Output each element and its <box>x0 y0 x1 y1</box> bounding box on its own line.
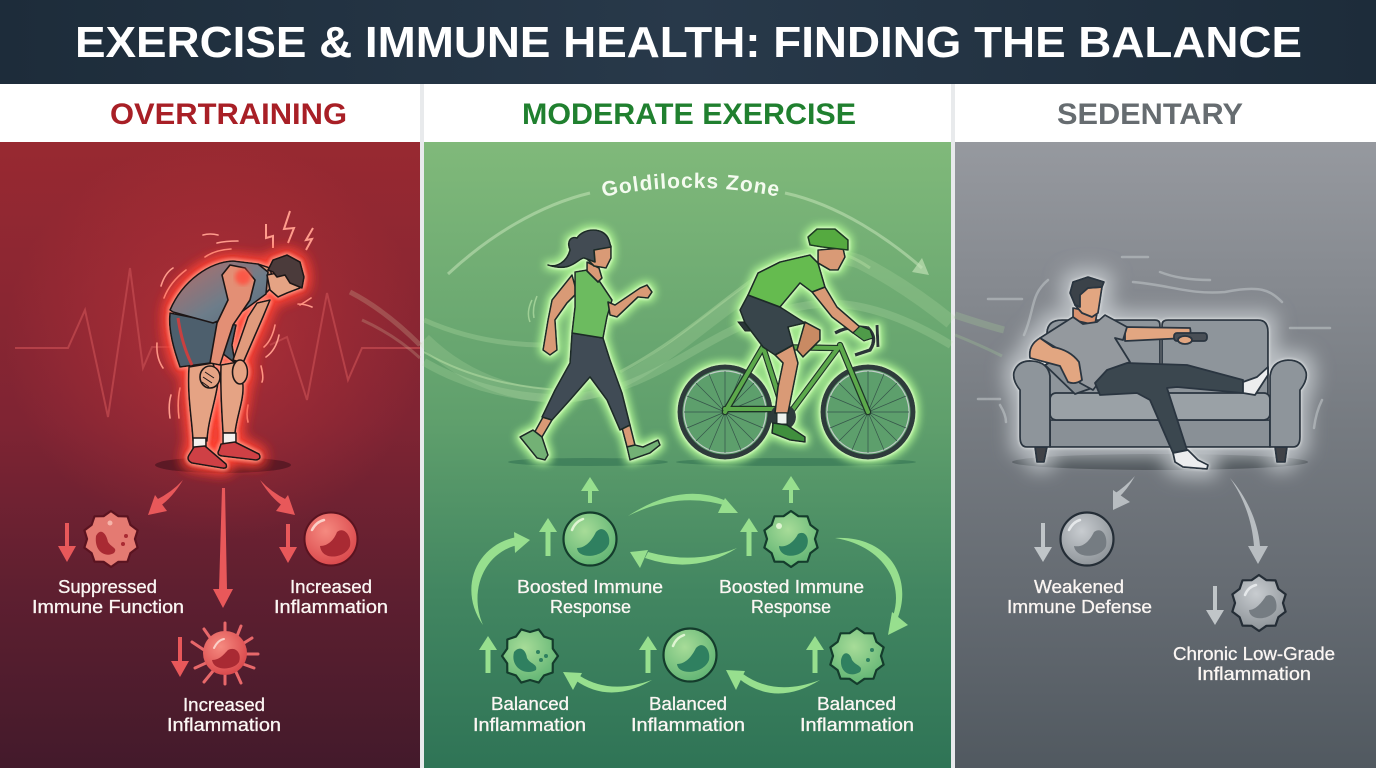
lightning bolts <box>266 211 313 250</box>
panel background: sedentary <box>955 142 1376 768</box>
head <box>818 248 845 270</box>
item: balanced inflammation middle <box>631 628 745 735</box>
panel heading: overtraining: OVERTRAINING <box>110 98 347 131</box>
arrows: from couch <box>1113 476 1268 564</box>
title banner: EXERCISE & IMMUNE HEALTH: FINDING THE BALANCE <box>75 18 1302 67</box>
figure: walker <box>508 230 668 466</box>
torso <box>1040 315 1130 390</box>
item: balanced inflammation right: Balanced <box>817 694 896 714</box>
arrows: immune cycle <box>471 494 908 694</box>
far arm <box>1125 327 1190 341</box>
sock lower <box>1173 450 1208 469</box>
item: balanced inflammation left: Inflammation <box>473 715 586 735</box>
head <box>1075 287 1102 317</box>
item: boosted immune response left: Response <box>550 597 631 617</box>
wisps <box>978 257 1330 428</box>
remote <box>1174 333 1207 341</box>
sock upper <box>1243 367 1268 395</box>
item: balanced inflammation middle: Balanced <box>649 694 727 714</box>
panel heading: moderate exercise <box>424 84 951 142</box>
panel heading: sedentary <box>955 84 1376 142</box>
item: boosted immune response right: Response <box>751 597 831 617</box>
couch <box>1014 320 1306 462</box>
frame <box>725 345 868 413</box>
item: chronic low-grade inflammation <box>1173 569 1335 684</box>
item: increased inflammation right: Inflammation <box>274 597 388 617</box>
ribbon: right transition <box>955 315 1004 356</box>
shorts <box>740 295 805 355</box>
item: suppressed immune function <box>32 505 184 617</box>
arm <box>812 287 860 333</box>
far leg <box>797 322 820 357</box>
item: boosted immune response right: Boosted Immune <box>719 577 864 597</box>
title banner <box>0 0 1376 84</box>
panel heading: sedentary: SEDENTARY <box>1057 98 1243 131</box>
item: balanced inflammation left: Balanced <box>491 694 569 714</box>
item: weakened immune defense <box>1007 512 1152 617</box>
item: chronic low-grade inflammation: Chronic Low-Grade <box>1173 644 1335 664</box>
ribbons: energy waves <box>424 250 951 398</box>
item: weakened immune defense: Weakened <box>1034 577 1124 597</box>
arc: goldilocks zone: Goldilocks Zone <box>602 172 778 196</box>
trousers <box>1095 363 1243 453</box>
item: increased inflammation right <box>274 512 388 617</box>
item: balanced inflammation left <box>473 629 586 735</box>
figure: exhausted runner <box>155 211 313 473</box>
item: increased inflammation right: Increased <box>290 577 372 597</box>
item: boosted immune response right <box>719 476 864 617</box>
panel: moderate exercise <box>419 84 955 768</box>
panel heading: moderate exercise: MODERATE EXERCISE <box>522 98 856 131</box>
item: boosted immune response left: Boosted Immune <box>517 577 663 597</box>
item: increased inflammation bottom: Inflammation <box>167 715 281 735</box>
strain lines <box>157 234 312 422</box>
panel: overtraining <box>0 84 425 768</box>
neck <box>1073 308 1097 325</box>
figure: cyclist <box>676 229 916 466</box>
arc: goldilocks zone <box>447 172 929 275</box>
torso <box>748 255 825 307</box>
wheels <box>680 367 913 457</box>
item: weakened immune defense: Immune Defense <box>1007 597 1152 617</box>
item: increased inflammation bottom <box>167 623 281 735</box>
item: balanced inflammation right <box>800 622 914 735</box>
item: increased inflammation bottom: Increased <box>183 695 265 715</box>
item: boosted immune response left <box>517 477 663 617</box>
item: balanced inflammation right: Inflammation <box>800 715 914 735</box>
near leg <box>775 345 798 413</box>
figure: person on couch <box>1012 277 1308 470</box>
item: suppressed immune function: Immune Function <box>32 597 184 617</box>
item: balanced inflammation middle: Inflammation <box>631 715 745 735</box>
panel: sedentary <box>955 84 1376 768</box>
panel background: overtraining <box>0 140 425 768</box>
arrows: from runner <box>148 480 295 608</box>
cushion <box>1045 350 1092 394</box>
ribbon: left transition <box>350 292 420 358</box>
panel heading: overtraining <box>0 84 420 142</box>
near arm <box>1030 338 1082 383</box>
heartbeat line <box>15 268 420 417</box>
item: chronic low-grade inflammation: Inflammation <box>1197 664 1311 684</box>
item: suppressed immune function: Suppressed <box>58 577 157 597</box>
panel background: moderate <box>424 142 951 768</box>
